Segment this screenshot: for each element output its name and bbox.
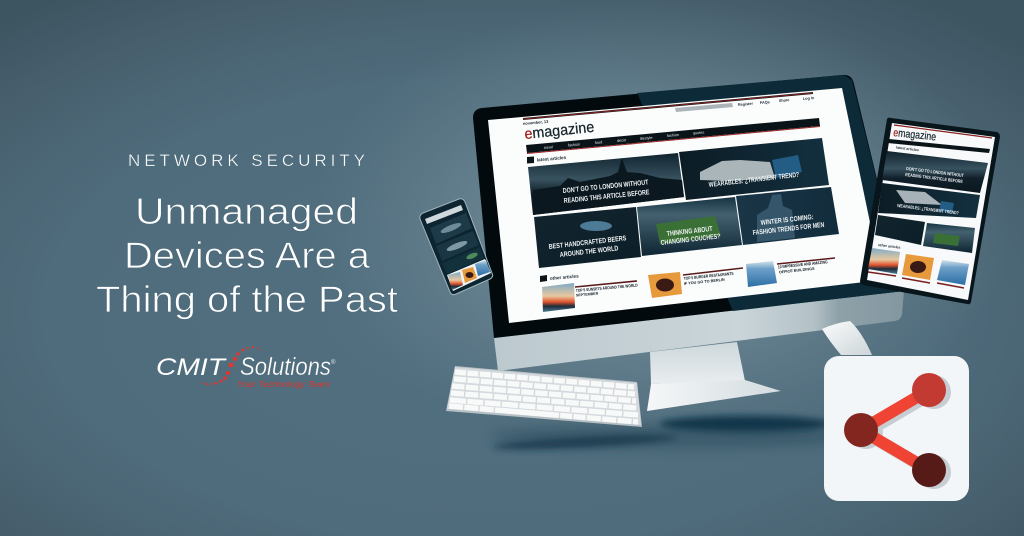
burger xyxy=(656,278,674,292)
tablet tile 4 couch xyxy=(933,233,960,246)
tablet body xyxy=(860,118,1000,304)
top links: Share xyxy=(779,98,790,103)
nav bar red rule xyxy=(527,126,820,154)
article title: sunsets: TOP 5 SUNSETS AROUND THE WORLD xyxy=(576,283,638,293)
tile: fashion article: FASHION TRENDS FOR MEN xyxy=(752,222,825,237)
soft floor shadow xyxy=(490,424,870,448)
badge background xyxy=(824,356,969,501)
article title: buildings: OFFICE BUILDINGS xyxy=(779,267,815,274)
tablet burger xyxy=(910,261,926,273)
tablet tile 3 xyxy=(875,215,925,245)
eyebrow: network security: NETWORK SECURITY xyxy=(128,151,365,170)
icon: share badge xyxy=(824,356,969,501)
nav items: decor xyxy=(617,138,627,143)
nav items: quotes xyxy=(693,130,705,135)
share connector lines xyxy=(861,390,929,470)
tablet tile 1 xyxy=(882,151,988,193)
article title: sunsets: SEPTEMBER xyxy=(576,292,599,297)
heading square: other articles xyxy=(540,275,547,282)
top links: Log In xyxy=(803,96,815,101)
top links: Register xyxy=(738,102,754,107)
logo wordmark Solutions: Solutions xyxy=(240,353,331,381)
green couch xyxy=(656,216,721,244)
phone thumbnail: burger xyxy=(462,267,477,283)
monitor bezel xyxy=(473,75,904,338)
article title: burgers: TOP 5 BURGER RESTAURANTS xyxy=(684,271,734,281)
keyboard xyxy=(446,366,642,427)
phone tile 3 xyxy=(442,247,484,274)
top links: FAQs xyxy=(760,100,770,105)
bezel reflection xyxy=(637,75,904,311)
share node bottom xyxy=(912,453,946,487)
tablet logo: emagazine xyxy=(893,127,937,143)
top rule xyxy=(523,93,813,119)
logo registered mark: ® xyxy=(331,359,336,366)
share node middle xyxy=(844,413,878,447)
heading: other articles: other articles xyxy=(550,273,579,281)
nav items: fashion xyxy=(667,133,679,138)
hand xyxy=(700,160,775,181)
tile: couches article: CHANGING COUCHES? xyxy=(660,233,721,247)
phone tile 2 xyxy=(436,231,479,261)
monitor stand foot xyxy=(647,380,781,411)
tile: wearables article xyxy=(679,138,829,200)
monitor stand neck xyxy=(650,342,745,384)
tile: beers article: BEST HANDCRAFTED BEERS xyxy=(548,235,627,251)
date: november, 13 xyxy=(523,119,549,126)
tablet thumbnail: burger xyxy=(902,254,934,280)
tablet tile 4 xyxy=(923,223,975,253)
nav items xyxy=(544,130,705,150)
monitor xyxy=(473,75,904,411)
tablet nav bar xyxy=(888,139,990,153)
phone xyxy=(420,199,493,295)
tile: beers article: AROUND THE WORLD xyxy=(559,245,619,259)
tile: couches article xyxy=(637,197,742,256)
tablet xyxy=(860,118,1000,304)
glow xyxy=(580,221,612,231)
nav items: travel xyxy=(544,145,553,150)
nav bar xyxy=(526,118,820,153)
tile: fashion article xyxy=(736,187,839,245)
tablet screen xyxy=(867,123,995,300)
tablet heading: latest articles xyxy=(896,146,919,152)
phone tile 2 highlight xyxy=(446,239,468,253)
shadow under keyboard xyxy=(493,432,677,452)
key rows xyxy=(449,372,638,422)
man figure xyxy=(757,194,795,242)
phone content strip xyxy=(447,259,491,291)
thumbnail: blue building xyxy=(746,261,777,287)
skyline xyxy=(533,158,684,215)
nav items: food xyxy=(595,140,602,145)
phone tile 3 highlight xyxy=(466,251,478,261)
phone tile 1 xyxy=(430,213,472,244)
article title: burgers xyxy=(683,268,743,286)
tile: London article: DON'T GO TO LONDON WITHOUT xyxy=(562,179,649,195)
monitor chin xyxy=(494,291,904,371)
title line 3: Thing of the Past xyxy=(96,279,399,320)
tablet heading: other articles: other articles xyxy=(878,243,901,250)
other articles section xyxy=(540,258,835,312)
article title: buildings: 10 IMPRESSIVE AND AMAZING xyxy=(778,259,828,269)
phone burger xyxy=(466,272,474,278)
tile: couches article: THINKING ABOUT xyxy=(666,226,713,238)
tablet tile 1: READING THIS ARTICLE BEFORE xyxy=(905,172,963,184)
shadow under monitor xyxy=(660,416,830,432)
phone tile 1 highlight xyxy=(440,221,462,235)
nav items: fashion xyxy=(568,142,580,147)
nav items: lifestyle xyxy=(640,136,653,141)
tile: London article xyxy=(528,153,684,215)
logo wordmark CMIT: CMIT xyxy=(156,354,228,381)
tablet thumbnail: sunset xyxy=(868,248,900,274)
phone body xyxy=(420,199,493,295)
tile: fashion article: WINTER IS COMING: xyxy=(760,214,814,227)
website header xyxy=(523,93,820,164)
monitor stand arm xyxy=(822,321,872,355)
thumbnail: sunset xyxy=(542,283,575,312)
logo dotted arc xyxy=(201,346,262,385)
logo: emagazine: emagazine xyxy=(524,119,595,143)
tile: beers article xyxy=(534,207,641,268)
share node top xyxy=(912,373,946,407)
phone screen header xyxy=(425,205,463,224)
monitor screen xyxy=(488,88,882,323)
search box xyxy=(675,103,733,112)
tablet thumbnail: blue xyxy=(937,260,969,285)
top links xyxy=(738,96,815,107)
tile: wearables article: WEARABLES: ¿TRANSIENT TREND? xyxy=(708,172,800,189)
tablet tile 2 xyxy=(878,183,980,218)
article title: burgers: IF YOU GO TO BERLIN xyxy=(684,278,725,286)
icon shadows xyxy=(849,375,951,489)
tablet tile 2: WEARABLES: ¿TRANSIENT TREND? xyxy=(897,203,959,216)
tablet tile 1: DON'T GO TO LONDON WITHOUT xyxy=(906,166,964,178)
keyboard body xyxy=(446,366,642,427)
article title: sunsets xyxy=(575,281,638,297)
tablet thumbnail red rules xyxy=(868,272,964,288)
sleeve xyxy=(772,155,802,178)
tablet red rule xyxy=(894,125,992,138)
logo tagline: Your Technology Team xyxy=(237,380,330,389)
title line 2: Devices Are a xyxy=(124,235,370,276)
tile: London article: READING THIS ARTICLE BEFORE xyxy=(563,189,650,205)
article title: buildings xyxy=(777,258,835,274)
phone thumbnail: sunset xyxy=(448,272,463,290)
logo: CMIT Solutions xyxy=(156,346,336,389)
title line 1: Unmanaged xyxy=(135,191,358,232)
heading square: latest articles xyxy=(527,156,534,164)
heading: latest articles: latest articles xyxy=(537,155,567,162)
phone thumbnail: blue xyxy=(475,260,490,276)
text block: headline xyxy=(96,151,399,320)
thumbnail: burger xyxy=(648,272,682,298)
